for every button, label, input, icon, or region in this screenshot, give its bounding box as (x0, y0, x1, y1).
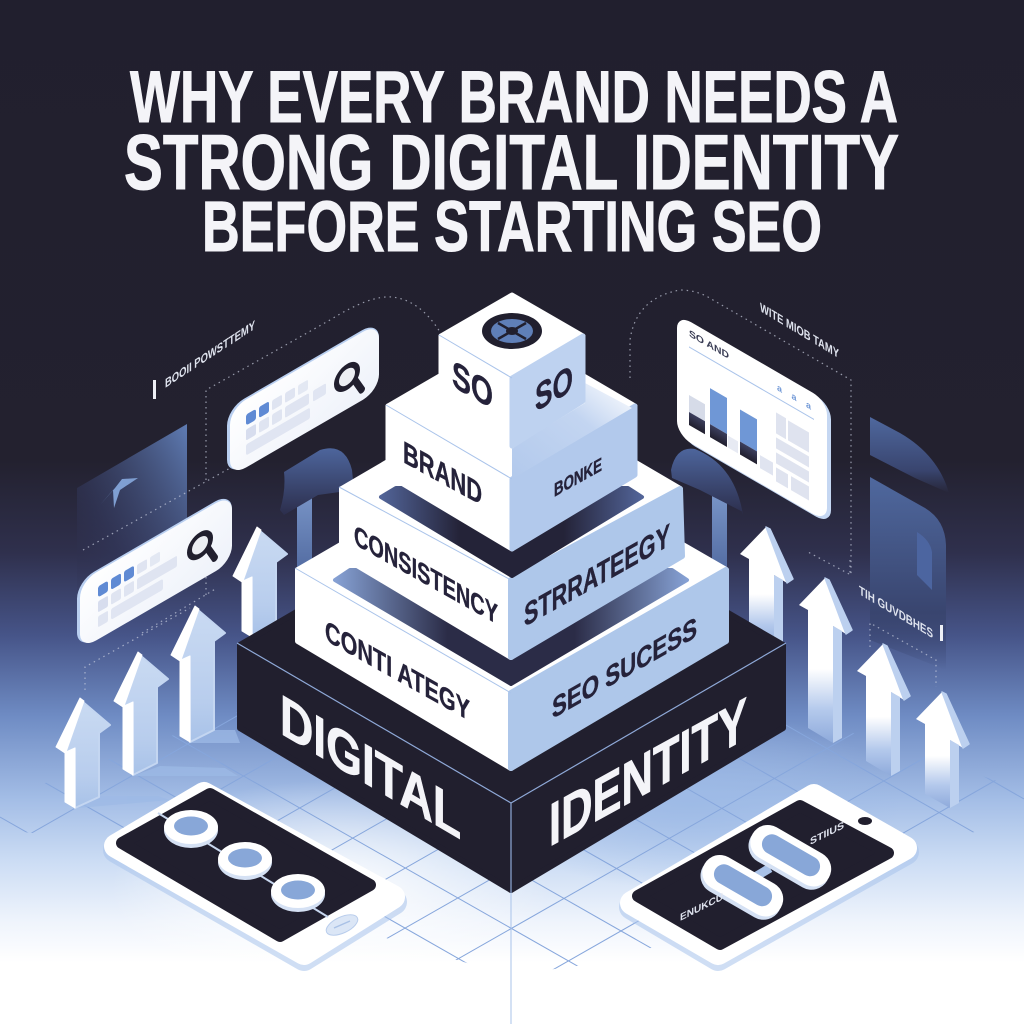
title (124, 57, 899, 267)
text: identity: IDENTITY (549, 684, 747, 860)
text: digital: DIGITAL (280, 682, 461, 853)
text: consistency: CONSISTENCY (354, 520, 498, 631)
toggle 1 (164, 810, 218, 848)
arrow 1 (56, 698, 110, 808)
icon: cube emblem (482, 313, 542, 349)
title: BEFORE STARTING SEO (202, 188, 822, 267)
tier: lower block (295, 446, 726, 768)
tier: digital identity base (237, 487, 786, 893)
toggle 2 (218, 842, 272, 880)
text: conti ategy: CONTI ATEGY (325, 614, 470, 728)
tier: brand block (386, 334, 635, 549)
home pill (323, 911, 361, 939)
arrow 3 (171, 606, 225, 742)
arrows right (740, 527, 969, 808)
arrow R4 (916, 692, 969, 808)
tier: top cube (439, 295, 583, 446)
screen text left: ENUKCU (680, 891, 723, 924)
label: top right: WITE MIOB TAMY (760, 300, 839, 361)
arrows left (56, 527, 287, 808)
screen text right: STIIUS (810, 820, 844, 848)
silhouette: right tall arrow (671, 449, 743, 570)
pill toggle upper (742, 819, 838, 896)
pyramid (237, 295, 786, 893)
search card upper (227, 320, 379, 479)
text: strategy: STRRATEEGY (524, 517, 670, 634)
text: brand: BRAND (403, 435, 482, 513)
label: lower right: TIH GUVDBHES (859, 583, 933, 641)
small blue marks: a a a (777, 383, 812, 413)
dotted connector lines (83, 290, 936, 690)
panel heading: SO AND (689, 329, 729, 362)
silhouette: left tall arrow (280, 448, 354, 570)
floor light patch (110, 780, 550, 1000)
label: top left (153, 318, 255, 399)
phone left (116, 794, 394, 958)
bar chart (689, 376, 773, 476)
arrow R1 (740, 527, 793, 649)
tier: consistency block (339, 390, 682, 657)
analytics chart panel (677, 314, 831, 525)
arrow 4 (233, 527, 287, 637)
data table blocks (776, 412, 809, 501)
silhouette: right building (870, 417, 949, 670)
arrow shadows (77, 730, 240, 808)
floor blue patch (480, 710, 900, 890)
silhouette: left building with star (77, 424, 187, 610)
centre floor line (510, 893, 512, 1024)
arrow R2 (799, 578, 852, 743)
floor grid (0, 697, 1024, 981)
text: so left: SO (452, 352, 493, 418)
heading rule (689, 347, 814, 419)
toggle 3 (271, 874, 325, 912)
connector (750, 868, 770, 880)
camera dot (858, 817, 872, 825)
arrow 2 (114, 652, 168, 775)
text: so right: SO (535, 356, 573, 420)
arrow R3 (857, 644, 910, 776)
search card lower (77, 492, 232, 652)
text: bonke: BONKE (554, 454, 602, 502)
label: top left: BOOII POWSTTEMY (165, 318, 255, 391)
phone right (632, 796, 906, 958)
text: seo sucess: SEO SUCESS (552, 610, 697, 725)
pill toggle lower (694, 849, 790, 926)
